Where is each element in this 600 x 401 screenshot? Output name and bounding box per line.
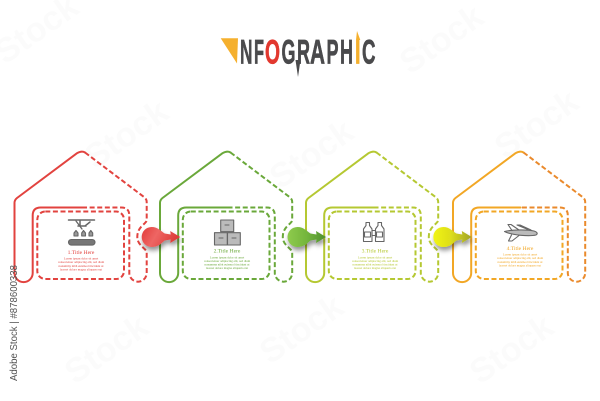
stock watermark: Stock (263, 112, 361, 197)
step body text: nonummy nibh euismod tincidunt ut (352, 262, 398, 266)
inner dashed frame (476, 212, 562, 279)
step body text: nonummy nibh euismod tincidunt ut (497, 260, 543, 264)
icon: bottles (364, 222, 384, 242)
panel: step 2 (160, 152, 292, 282)
step body text: consectetuer adipiscing elit, sed diam (497, 256, 544, 261)
title lettering: F (254, 34, 264, 72)
stock watermark: Stock (58, 307, 156, 392)
step body text: consectetuer adipiscing elit, sed diam (352, 259, 399, 264)
title spikes (296, 31, 360, 77)
step title: 1.Title Here (68, 250, 95, 256)
step body text: nonummy nibh euismod tincidunt ut (58, 264, 104, 268)
step body text: laoreet dolore magna aliquam erat (499, 263, 541, 267)
icon: airplane (504, 224, 537, 241)
step body text: Lorem ipsum dolor sit amet (503, 253, 537, 257)
step body text: laoreet dolore magna aliquam erat (354, 266, 396, 270)
step body text: laoreet dolore magna aliquam erat (206, 266, 248, 270)
outer dashed line (228, 152, 292, 282)
step body text: nonummy nibh euismod tincidunt ut (204, 262, 250, 266)
inner dashed frame (183, 212, 270, 279)
step body text: Lorem ipsum dolor sit amet (64, 257, 98, 261)
arrow: green bulb (288, 227, 326, 247)
title lettering: O (265, 34, 280, 72)
outer solid line (453, 152, 524, 282)
stock watermark: Stock (463, 307, 561, 392)
icon: stacked boxes (214, 220, 240, 245)
title lettering: G (282, 34, 296, 72)
outer dashed line (82, 152, 147, 282)
outer solid line (14, 152, 85, 282)
step title: 4.Title Here (507, 246, 534, 252)
step body text (497, 253, 544, 267)
stock watermark: Stock (488, 82, 586, 167)
title lettering: I (355, 34, 360, 72)
outer solid line (160, 152, 230, 282)
inner dashed frame (37, 212, 124, 279)
inner dashed frame (329, 212, 416, 279)
step body text: consectetuer adipiscing elit, sed diam (58, 260, 105, 265)
step title: 3.Title Here (362, 248, 389, 254)
icon: conveyor robot (68, 220, 95, 245)
title lettering: H (340, 34, 353, 72)
title yellow wedge (221, 38, 238, 64)
arrow: yellow bulb (433, 227, 472, 247)
step body text (204, 255, 251, 270)
title lettering: C (362, 34, 376, 72)
panel: step 4 (453, 152, 585, 282)
step body text: laoreet dolore magna aliquam erat (60, 268, 102, 272)
step body text (58, 257, 105, 272)
step body text: consectetuer adipiscing elit, sed diam (204, 259, 251, 264)
outer dashed line (374, 152, 438, 282)
outer dashed line (520, 152, 585, 282)
title lettering: A (310, 34, 325, 72)
panel: step 3 (306, 152, 438, 282)
outer solid line (306, 152, 376, 282)
stock watermark: Stock (78, 92, 176, 177)
title lettering: N (240, 34, 252, 72)
title (221, 31, 376, 77)
arrow: red bulb (142, 227, 180, 247)
title lettering (240, 34, 376, 72)
title lettering: P (326, 34, 338, 72)
stock id label: Adobe Stock | #878600338 (9, 265, 20, 381)
stock watermark: Stock (253, 287, 351, 372)
step body text: Lorem ipsum dolor sit amet (358, 255, 392, 259)
step title: 2.Title Here (214, 248, 241, 254)
title lettering: R (297, 34, 310, 72)
step body text: Lorem ipsum dolor sit amet (210, 255, 244, 259)
step body text (352, 255, 399, 270)
panel: step 1 (14, 152, 147, 282)
